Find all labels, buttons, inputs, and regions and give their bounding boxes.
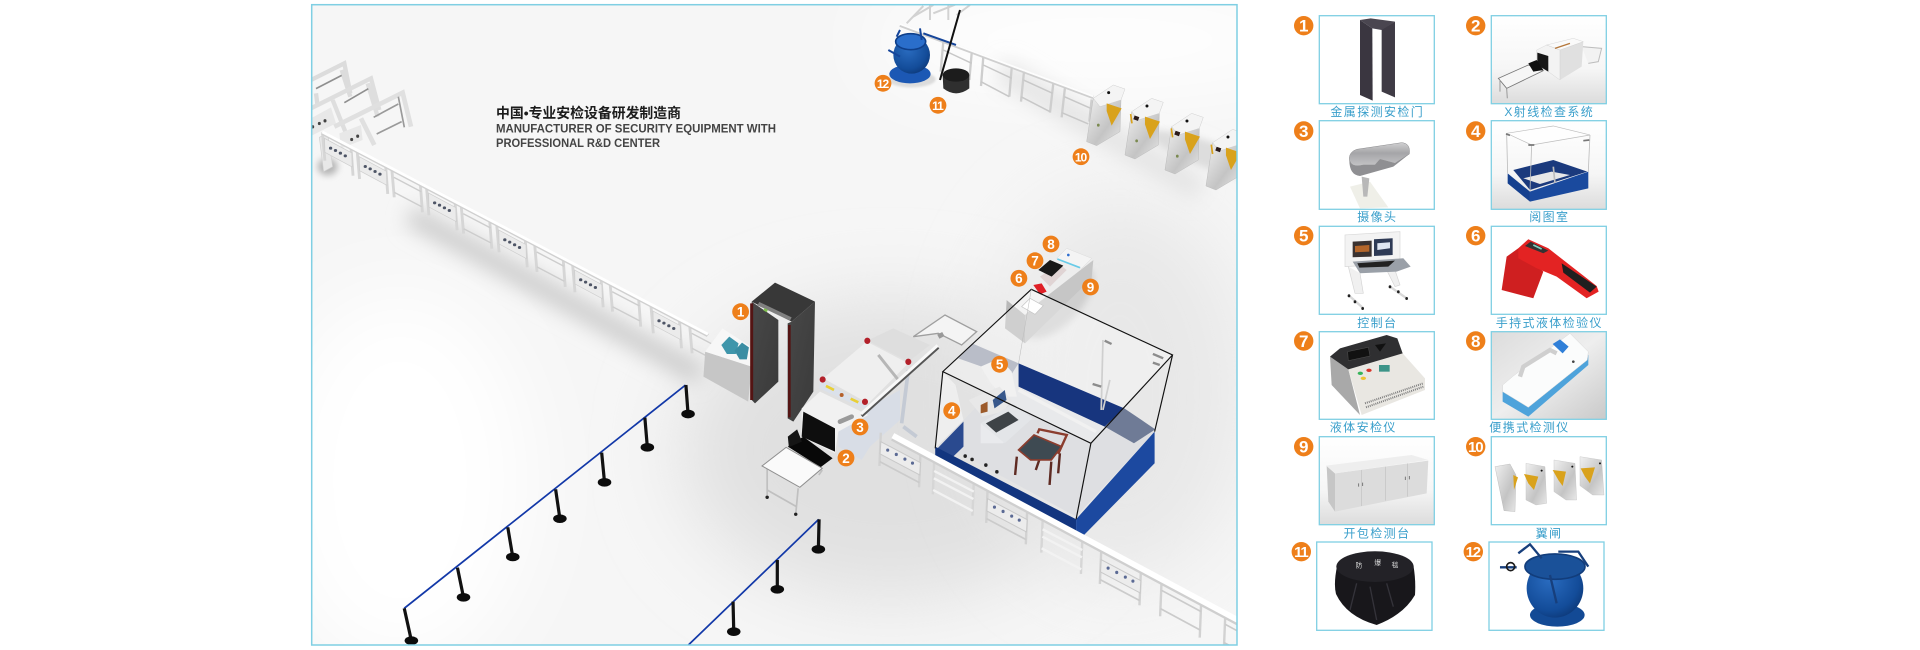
legend card 1: metal detector: 金属探测安检门 (1330, 104, 1424, 119)
scene number markers: 10 (1075, 150, 1087, 164)
queue barriers (404, 385, 825, 645)
legend card 11: blast blanket (1292, 542, 1432, 630)
legend card 6: handheld liquid tester: 6 (1471, 227, 1480, 246)
panel border (312, 5, 1237, 645)
legend card 11: blast blanket: 防 (1356, 560, 1363, 569)
chair (1015, 429, 1067, 485)
title: 中国•专业安检设备研发制造商 (496, 105, 681, 121)
top right fence (900, 5, 1093, 124)
title: PROFESSIONAL R&D CENTER (496, 136, 660, 150)
legend card 9: bag inspection cabinet: 开包检测台 (1343, 526, 1411, 540)
legend card 11: blast blanket: 11 (1294, 544, 1308, 561)
legend card 3: camera: 3 (1299, 122, 1308, 141)
scene number markers: 2 (842, 451, 850, 466)
legend card 12: explosion-proof tank (1464, 542, 1604, 630)
blast tank and blanket (888, 10, 969, 93)
legend card 1: metal detector: 1 (1299, 17, 1308, 36)
title (496, 105, 776, 150)
legend card 7: liquid inspector: 液体安检仪 (1330, 420, 1397, 435)
long left fence (322, 132, 720, 368)
scene number markers: 9 (1087, 280, 1094, 295)
legend card 8: portable detector: 8 (1471, 332, 1480, 351)
left gates (311, 63, 411, 175)
legend card 8: portable detector (1466, 331, 1606, 435)
scene number markers: 1 (737, 305, 745, 320)
icon: metal detector gate (752, 283, 815, 422)
scene number markers: 6 (1015, 271, 1023, 286)
legend card 2: x-ray system: X射线检查系统 (1504, 104, 1594, 119)
control desk (963, 362, 1018, 474)
legend card 10: flap gates: 10 (1468, 439, 1483, 456)
scene number markers: 8 (1047, 237, 1055, 252)
legend card 6: handheld liquid tester: 手持式液体检验仪 (1496, 315, 1603, 330)
legend card 6: handheld liquid tester (1466, 226, 1606, 330)
legend card 11: blast blanket: 毯 (1392, 560, 1399, 569)
foreground fence (879, 433, 1265, 650)
legend card 10: flap gates: 翼闸 (1536, 526, 1562, 540)
title: MANUFACTURER OF SECURITY EQUIPMENT WITH (496, 122, 776, 136)
legend card 7: liquid inspector (1294, 331, 1434, 435)
scene number markers: 11 (932, 99, 944, 113)
security checkpoint infographic (310, 4, 1607, 646)
scene number markers: 3 (856, 420, 864, 435)
scene number markers: 12 (877, 77, 889, 91)
icon: x-ray machine (802, 315, 977, 460)
legend card 4: viewing room: 4 (1471, 122, 1481, 141)
legend card 7: liquid inspector: 7 (1299, 332, 1308, 351)
legend card 2: x-ray system: 2 (1471, 17, 1480, 36)
icon: x-ray input conveyor table (762, 429, 833, 516)
icon: inspection bench with devices (1005, 248, 1095, 344)
legend card 4: viewing room (1466, 121, 1606, 224)
legend card 10: flap gates (1466, 437, 1606, 540)
bag table with trays (704, 334, 750, 402)
legend card 1: metal detector (1294, 16, 1434, 119)
legend card 2: x-ray system (1466, 16, 1606, 119)
legend card 9: bag inspection cabinet: 9 (1299, 438, 1308, 457)
legend card 5: control desk: 5 (1299, 227, 1308, 246)
panel: checkpoint floor plan (312, 6, 1236, 644)
legend card 9: bag inspection cabinet (1294, 437, 1434, 540)
legend card 12: explosion-proof tank: 12 (1466, 544, 1481, 561)
legend card 5: control desk: 控制台 (1357, 315, 1397, 330)
legend card 3: camera (1294, 121, 1434, 224)
scene number markers: 4 (948, 404, 956, 419)
scene number markers: 7 (1031, 254, 1039, 269)
legend card 3: camera: 摄像头 (1357, 209, 1397, 224)
legend card 5: control desk (1294, 226, 1434, 330)
scene number markers: 5 (996, 357, 1004, 372)
panel: glass inspection room (879, 289, 1265, 650)
legend card 4: viewing room: 阅图室 (1529, 209, 1569, 224)
legend card 11: blast blanket: 爆 (1374, 558, 1381, 567)
flap turnstiles (1087, 85, 1280, 192)
legend card 8: portable detector: 便携式检测仪 (1489, 420, 1570, 435)
scene number markers (732, 75, 1099, 466)
